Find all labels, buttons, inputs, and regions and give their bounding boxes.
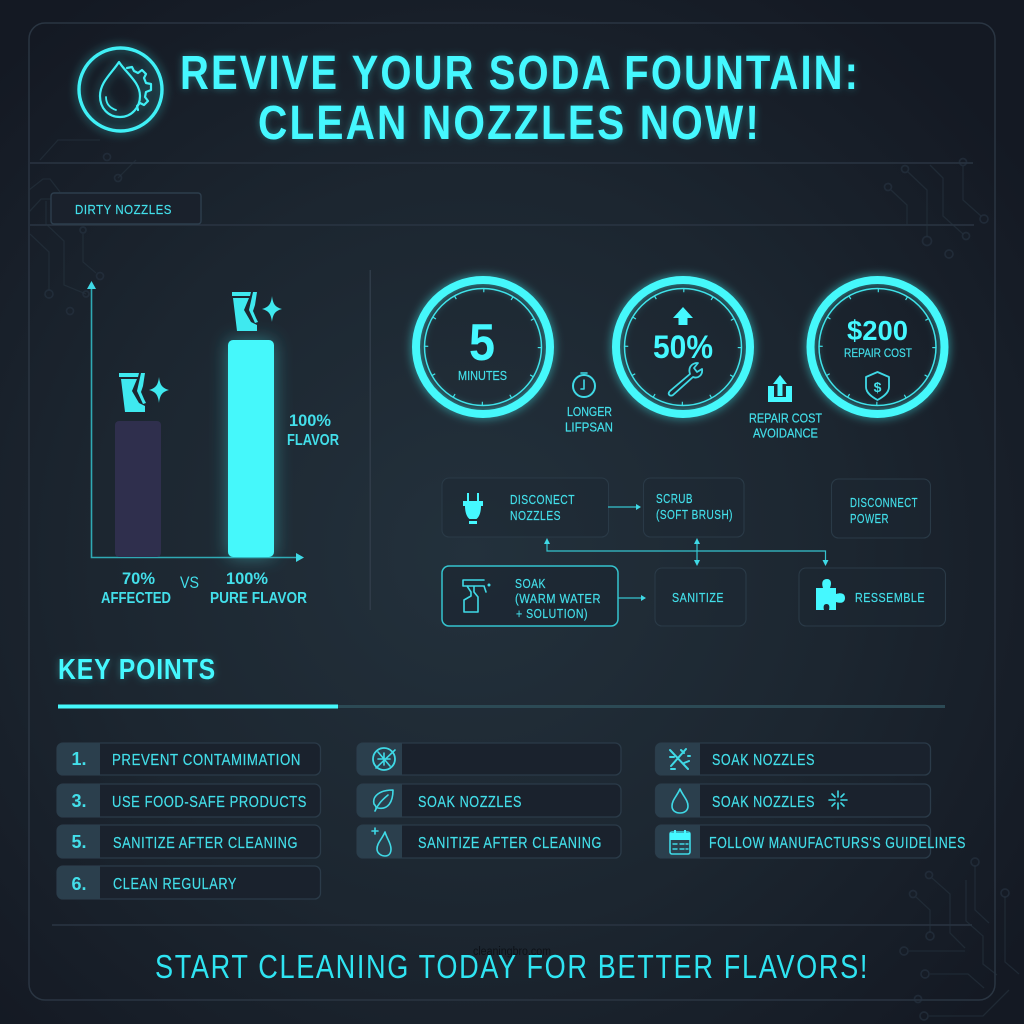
step: reassemble: RESSEMBLE (855, 590, 925, 605)
item: sanitize after cleaning with drop: SANITIZE AFTER CLEANING (418, 835, 602, 852)
icon: crossed tools (670, 749, 690, 769)
heading: dirty nozzles label (51, 193, 201, 224)
step: disconnect power (832, 479, 930, 538)
item: 5 sanitize after cleaning: SANITIZE AFTER CLEANING (113, 835, 298, 852)
item: 3 use food-safe products: 3. (71, 791, 87, 811)
stat: $200 repair cost: $200 (847, 315, 908, 346)
icon: puzzle piece (816, 579, 845, 610)
step: disconnect power: POWER (850, 511, 889, 526)
icon: water drop and gear (79, 48, 162, 131)
icon: cracked cup with sparkle, flavor bar (232, 292, 282, 331)
heading: key points: KEY POINTS (58, 654, 216, 686)
item: 5 sanitize after cleaning (57, 825, 320, 858)
title: CLEAN NOZZLES NOW! (258, 97, 761, 150)
icon: calendar (670, 830, 690, 854)
icon: plug (463, 493, 483, 524)
bar: 100% pure flavor (228, 340, 274, 557)
label: vs: VS (180, 573, 199, 592)
label: 100% pure flavor: PURE FLAVOR (210, 590, 307, 607)
icon: upload tray (768, 375, 792, 402)
icon: sparkling drop (372, 828, 391, 856)
label: 70% affected: AFFECTED (101, 590, 171, 607)
bar: 70% affected (115, 421, 161, 557)
step: disconnect power: DISCONNECT (850, 495, 918, 510)
title: REVIVE YOUR SODA FOUNTAIN: (180, 47, 860, 100)
step: soak: + SOLUTION) (516, 606, 588, 621)
item: 1 prevent contamination: PREVENT CONTAMIMATION (112, 752, 301, 769)
step: scrub: (SOFT BRUSH) (656, 507, 733, 522)
label: 100% pure flavor (210, 569, 307, 607)
key points progress rule (58, 704, 945, 708)
arrow: connector network (544, 538, 828, 566)
item: 3 use food-safe products (57, 784, 320, 817)
step: soak: (WARM WATER (515, 591, 601, 606)
process flow (442, 478, 946, 626)
step: sanitize: SANITIZE (672, 590, 724, 605)
callout: repair cost avoidance: REPAIR COST (749, 412, 822, 426)
label: 100% flavor (287, 411, 339, 449)
label: 100% flavor: 100% (289, 411, 331, 430)
item: soak nozzles with leaf (357, 784, 621, 817)
step: soak (442, 566, 618, 626)
item: sanitize after cleaning with drop (357, 825, 621, 858)
stat: 5 minutes: MINUTES (458, 369, 507, 383)
item: soak nozzles with tools: SOAK NOZZLES (712, 752, 815, 769)
bar chart: affected vs pure flavor (87, 281, 339, 607)
callout: repair cost avoidance: AVOIDANCE (753, 426, 818, 440)
step: soak: SOAK (515, 576, 546, 591)
step: disconnect nozzles: DISCONECT (510, 492, 575, 507)
arrow: soak to sanitize (618, 595, 646, 601)
stat: $200 repair cost: REPAIR COST (844, 346, 913, 360)
item: 5 sanitize after cleaning: 5. (71, 832, 87, 852)
icon: prohibited germ (373, 748, 395, 770)
item: follow manufacturer guidelines (656, 825, 966, 858)
label: 70% affected (101, 569, 171, 607)
step: scrub: SCRUB (656, 491, 693, 506)
arrow: disconnect to scrub (608, 504, 641, 510)
label: 70% affected: 70% (122, 569, 155, 588)
icon: sparkle burst (829, 791, 847, 809)
footer call to action: START CLEANING TODAY FOR BETTER FLAVORS! (155, 948, 869, 985)
watermark: cleaningbro.com (473, 946, 551, 958)
callout: longer lifespan (565, 373, 613, 434)
callout: longer lifespan: LIFPSAN (565, 420, 613, 434)
stat: 5 minutes (416, 280, 550, 414)
icon: timer (573, 373, 595, 397)
icon: wrench (669, 363, 702, 396)
step: reassemble (799, 568, 946, 626)
stat: 50% longer lifespan (616, 280, 750, 414)
stat: 50% longer lifespan: 50% (653, 329, 713, 365)
item: 6 clean regularly: 6. (71, 874, 87, 894)
step: sanitize (655, 568, 746, 626)
item: follow manufacturer guidelines: FOLLOW MANUFACTURS'S GUIDELINES (709, 835, 966, 852)
icon: dollar shield: $ (874, 379, 882, 395)
icon: leaf (374, 790, 393, 811)
icon: spray bottle (463, 580, 490, 612)
item: soak nozzles with drop (656, 784, 930, 817)
step: disconnect nozzles: NOZZLES (510, 508, 561, 523)
icon: cracked cup with sparkle, affected bar (119, 373, 169, 412)
title (180, 47, 860, 150)
item: 6 clean regularly (57, 866, 320, 899)
item: soak nozzles with tools (656, 743, 930, 775)
item: 1 prevent contamination (57, 743, 320, 775)
item: 1 prevent contamination: 1. (71, 749, 87, 769)
label: 100% pure flavor: 100% (226, 569, 268, 588)
item: 3 use food-safe products: USE FOOD-SAFE PRODUCTS (112, 794, 307, 811)
step: scrub (644, 478, 744, 537)
icon: up arrow (673, 307, 693, 325)
label: 100% flavor: FLAVOR (287, 432, 339, 449)
item: no-contamination icon row (357, 743, 621, 775)
chart axes (87, 281, 304, 562)
step: disconnect nozzles (442, 478, 608, 537)
key points list (57, 743, 966, 899)
callout: longer lifespan: LONGER (567, 405, 612, 419)
icon: water drop (672, 789, 688, 813)
heading: dirty nozzles label: DIRTY NOZZLES (75, 202, 172, 217)
stat: 5 minutes: 5 (469, 314, 495, 372)
item: 6 clean regularly: CLEAN REGULARY (113, 876, 237, 893)
stat: $200 repair cost (810, 280, 944, 414)
item: soak nozzles with leaf: SOAK NOZZLES (418, 794, 522, 811)
callout: repair cost avoidance (749, 375, 822, 440)
item: soak nozzles with drop: SOAK NOZZLES (712, 794, 815, 811)
